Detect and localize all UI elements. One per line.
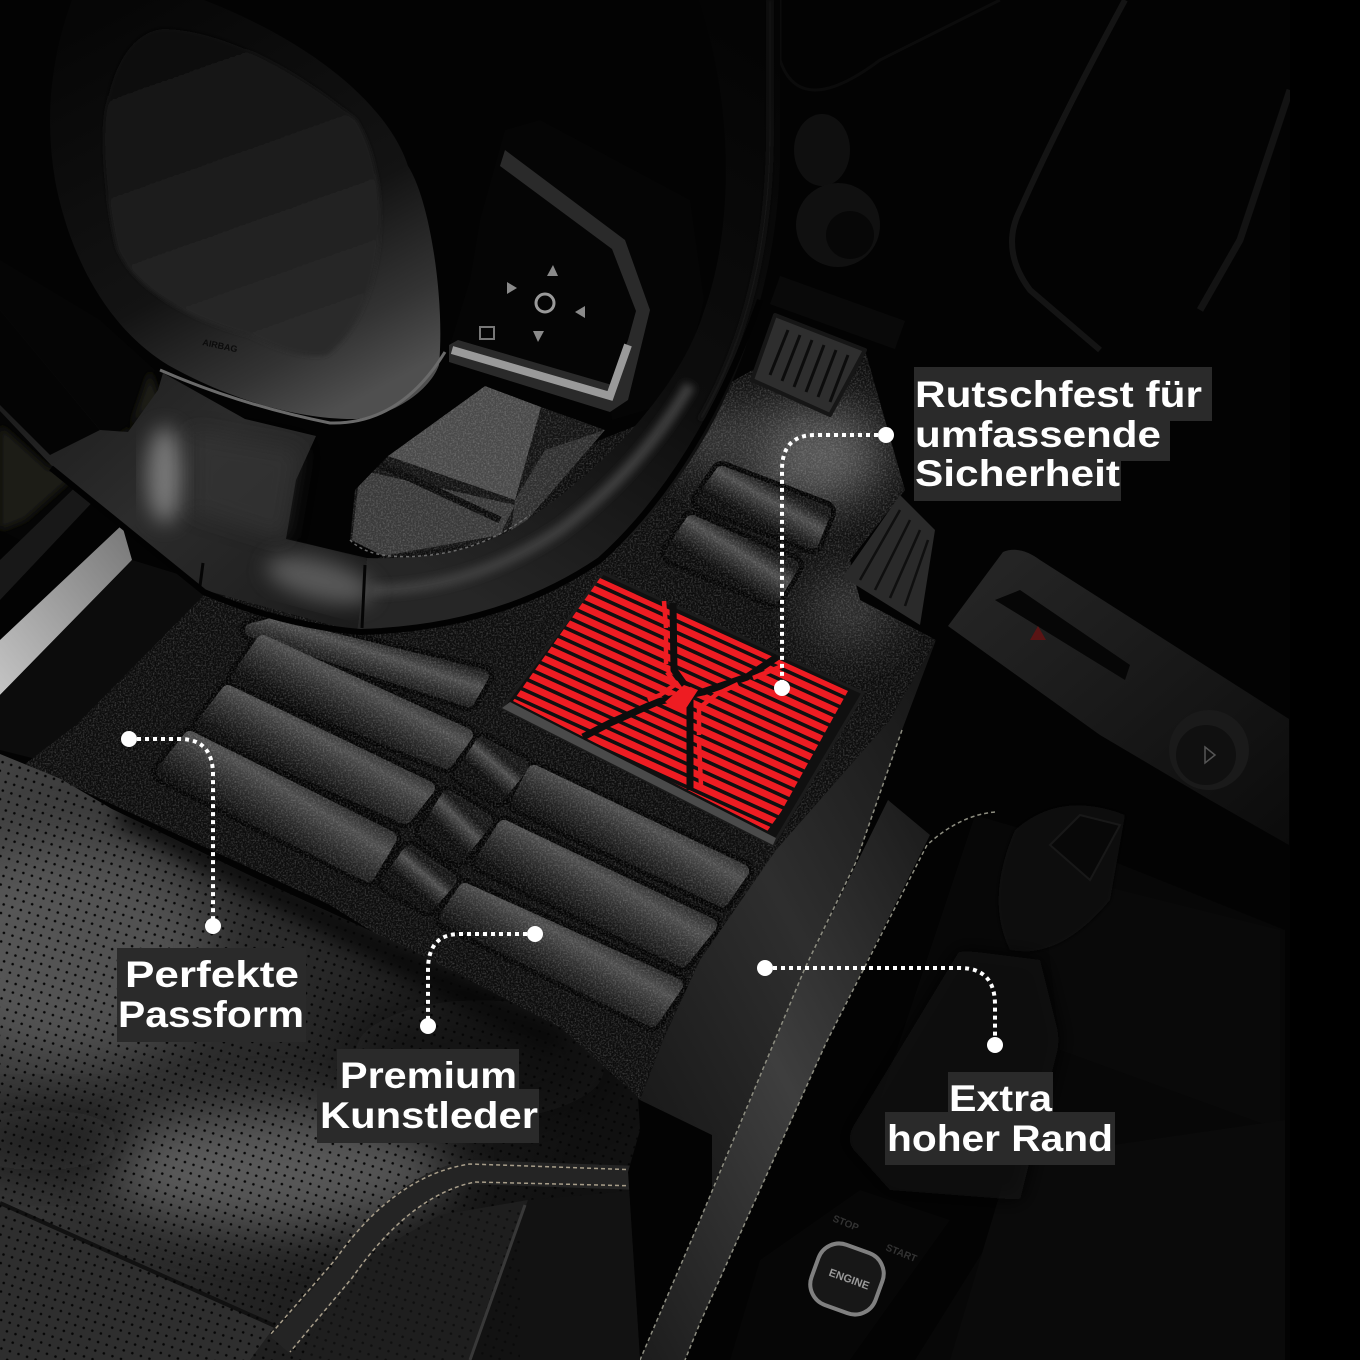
bolster band — [280, 1172, 640, 1345]
mat pads — [163, 473, 824, 1020]
callout: Extra hoher Rand: Extra — [949, 1078, 1052, 1119]
gear knob — [999, 805, 1125, 951]
gear shifter and centre tunnel: STOP — [831, 1214, 860, 1234]
airbag pad: AIRBAG — [202, 337, 238, 354]
callout: Premium Kunstleder — [317, 926, 543, 1143]
callout: Premium Kunstleder: Kunstleder — [320, 1095, 538, 1136]
label box — [117, 948, 306, 1042]
seat highlights — [0, 840, 210, 1060]
accelerator pedal — [752, 315, 865, 415]
callout: Extra hoher Rand: hoher Rand — [887, 1118, 1113, 1159]
callout: Perfekte Passform: Perfekte — [125, 954, 299, 995]
gear shifter and centre tunnel — [730, 805, 1285, 1360]
callout: Perfekte Passform: Passform — [118, 994, 304, 1035]
rest pedal — [843, 495, 935, 625]
callout: Perfekte Passform — [117, 731, 306, 1042]
dark X divider — [583, 603, 777, 790]
dashboard and air vent — [775, 0, 1290, 350]
stalk knob — [794, 114, 850, 186]
airbag pad — [104, 29, 380, 356]
right side fade — [1290, 0, 1360, 1360]
leather texture — [0, 340, 960, 1120]
rim stitching — [350, 515, 530, 557]
lower spoke and left rim — [0, 310, 367, 632]
callout: Premium Kunstleder: Premium — [340, 1055, 517, 1096]
dotted leader — [428, 934, 535, 1026]
rim outer dark edge — [51, 300, 760, 632]
console leather strip — [640, 800, 930, 1360]
lit mat surface — [745, 405, 885, 505]
callout: Rutschfest: umfassende — [915, 414, 1161, 455]
dotted leader — [782, 435, 886, 688]
label box — [317, 1049, 539, 1143]
raised side wall — [640, 640, 936, 1190]
label box — [885, 1072, 1115, 1165]
red anti-slip pad — [488, 570, 864, 845]
gear shifter and centre tunnel: START — [884, 1243, 918, 1265]
callout: Rutschfest — [774, 367, 1212, 696]
wheel rim — [357, 0, 780, 632]
silver spoke bar — [449, 150, 650, 412]
lower right cushion — [300, 1200, 528, 1360]
red stripes — [513, 578, 848, 831]
central hourglass — [665, 685, 698, 713]
pedals — [752, 315, 935, 625]
wheel centre frame — [50, 0, 440, 419]
steering wheel — [0, 0, 780, 632]
floor mat — [0, 340, 995, 1360]
callout: Extra hoher Rand — [757, 960, 1115, 1165]
callout: Rutschfest: Rutschfest für — [915, 374, 1202, 415]
start panel — [730, 1190, 950, 1360]
dotted leader — [765, 968, 995, 1045]
callout: Rutschfest: Sicherheit — [915, 453, 1120, 494]
pad frame — [502, 573, 863, 845]
perforation — [0, 750, 660, 1360]
control buttons — [480, 265, 585, 342]
lower left seat section — [176, 1297, 274, 1360]
hump seen through wheel — [350, 386, 605, 556]
gear shifter and centre tunnel: ENGINE — [827, 1267, 871, 1293]
dotted leader — [129, 739, 213, 926]
seat — [0, 750, 660, 1360]
right control panel — [948, 550, 1289, 845]
chrome trim line — [160, 352, 445, 423]
right spoke panel — [449, 120, 704, 420]
door sill — [0, 260, 230, 760]
label boxes — [914, 367, 1212, 501]
gear boot — [845, 950, 1060, 1200]
red connectors — [648, 601, 782, 785]
